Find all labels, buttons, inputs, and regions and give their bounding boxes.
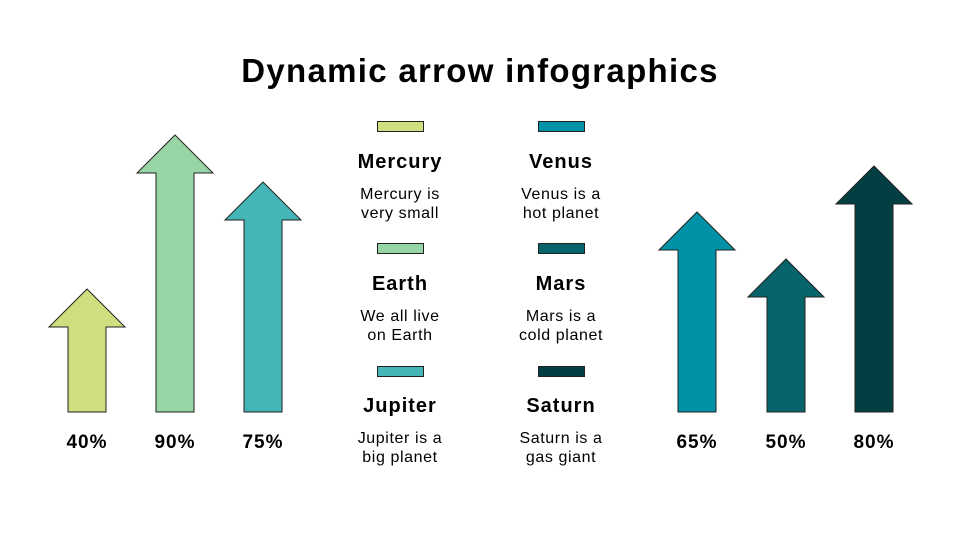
legend: Jupiter: big planet <box>362 449 438 466</box>
legend: Mars <box>519 243 603 344</box>
title: Dynamic arrow infographics <box>241 52 719 89</box>
legend: Earth <box>360 243 440 344</box>
legend: Saturn <box>519 366 603 466</box>
text: 50% <box>765 432 807 453</box>
legend: Venus: hot planet <box>523 205 599 222</box>
text: 90% <box>154 432 196 453</box>
legend: Venus: Venus <box>529 151 593 173</box>
legend: Saturn: gas giant <box>526 449 596 466</box>
legend: Saturn: Saturn is a <box>519 430 603 447</box>
legend: Jupiter: Jupiter is a <box>358 430 442 447</box>
legend: Earth: on Earth <box>367 327 433 344</box>
arrow: Venus 65% <box>659 212 735 412</box>
arrow: Mars 50% <box>748 259 824 412</box>
legend: Mercury: Mercury <box>358 151 442 173</box>
percent labels <box>66 432 895 453</box>
text: 75% <box>242 432 284 453</box>
legend: Mars: Mars <box>536 273 586 295</box>
legend: Mercury <box>358 121 442 222</box>
legend: Earth: Earth <box>372 273 428 295</box>
legend: Mars: Mars is a <box>526 308 596 325</box>
arrow: Saturn 80% <box>836 166 912 412</box>
arrow: Jupiter 75% <box>225 182 301 412</box>
legend: Earth: We all live <box>360 308 440 325</box>
legend: Mercury: very small <box>361 205 439 222</box>
text: 65% <box>676 432 718 453</box>
legend: Venus: Venus is a <box>521 186 601 203</box>
legend: Mars: cold planet <box>519 327 603 344</box>
text: 80% <box>853 432 895 453</box>
legend: Venus <box>521 121 601 222</box>
arrow: Earth 90% <box>137 135 213 412</box>
arrow: Mercury 40% <box>49 289 125 412</box>
legend: Mercury: Mercury is <box>360 186 440 203</box>
legend: Saturn: Saturn <box>526 395 596 417</box>
text: 40% <box>66 432 108 453</box>
legend: Jupiter: Jupiter <box>363 395 437 417</box>
legend: Jupiter <box>358 366 442 466</box>
